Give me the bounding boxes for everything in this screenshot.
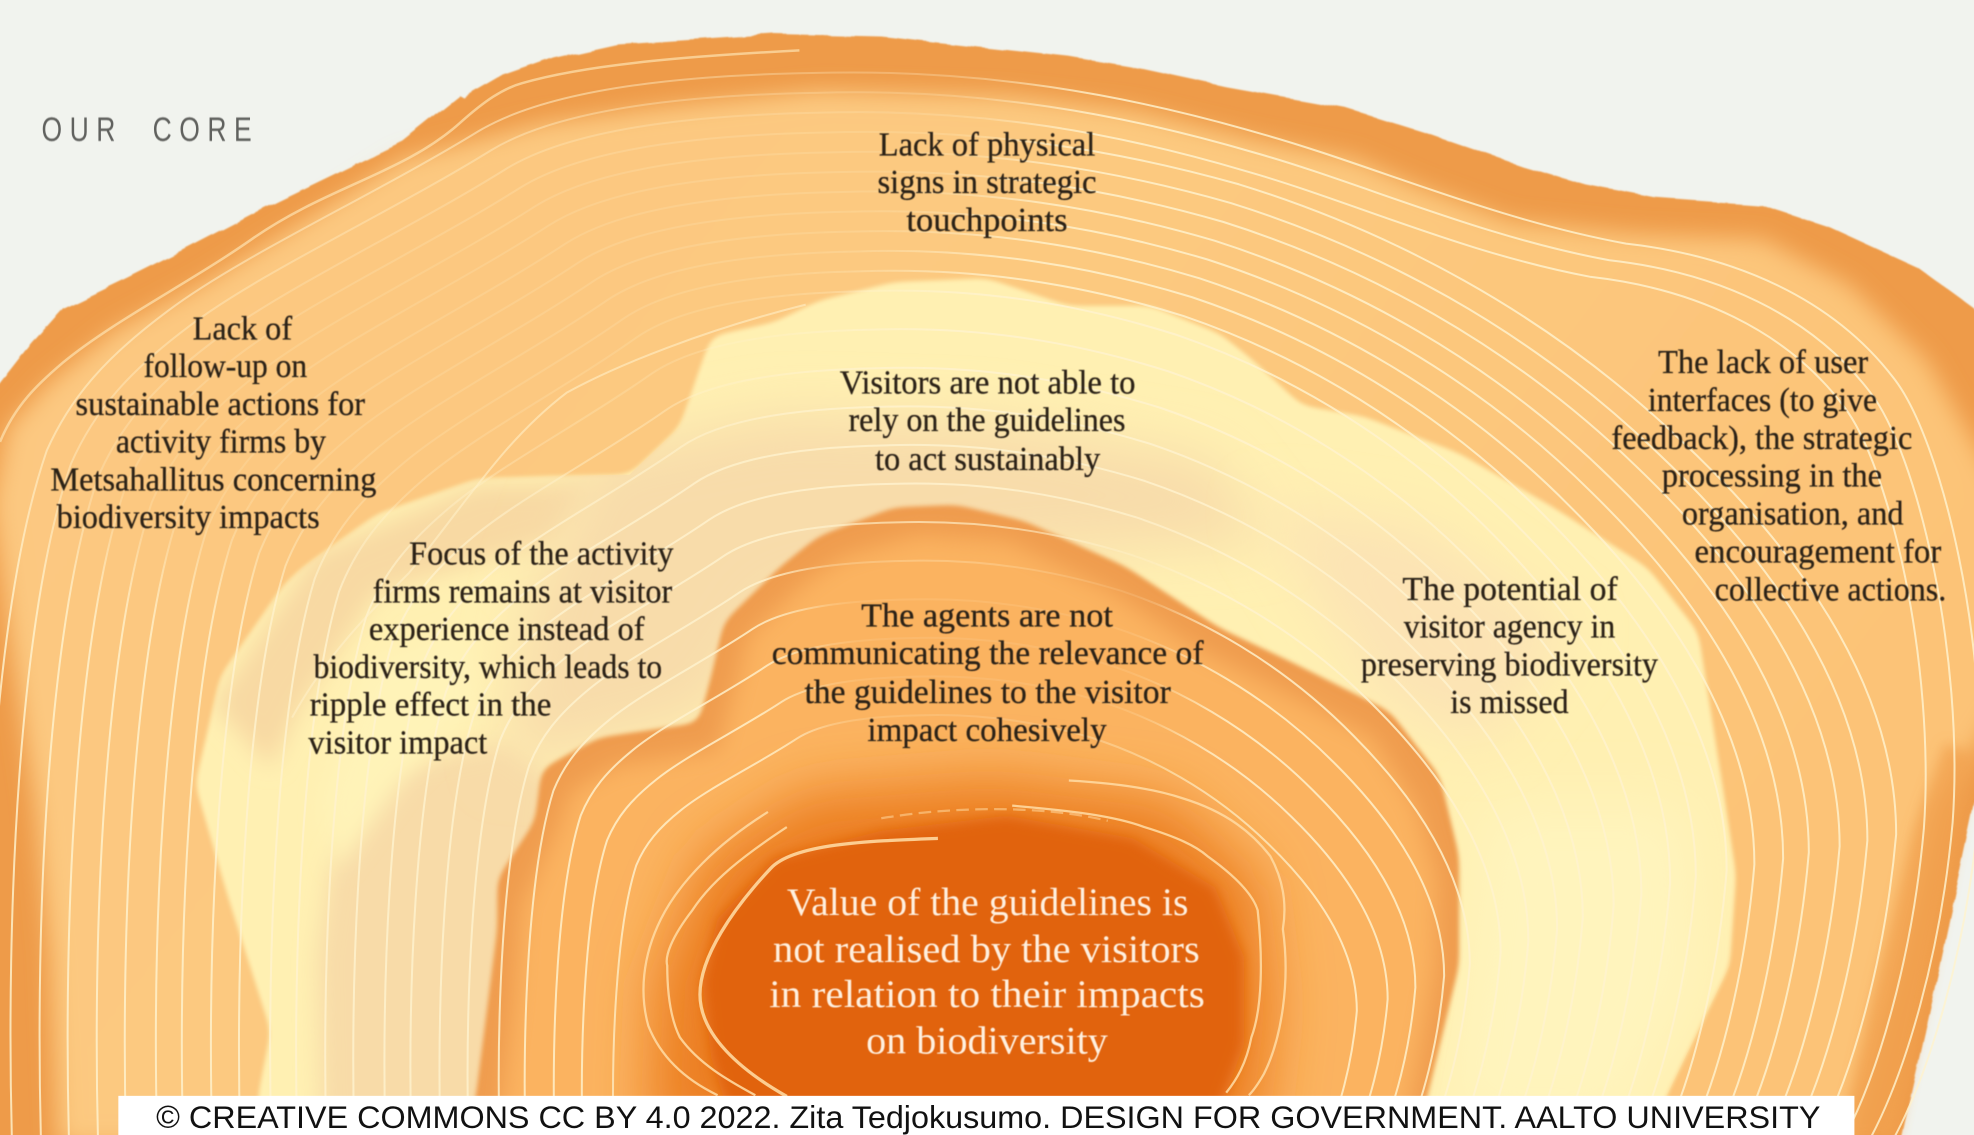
core statement: not realised by the visitors	[773, 928, 1200, 971]
core statement: Value of the guidelines is	[787, 881, 1188, 924]
text block: focus of activity firms: biodiversity, which leads to	[313, 649, 662, 686]
text block: lack of user interfaces: organisation, and	[1682, 495, 1903, 532]
text block: lack of physical signs: signs in strategic	[877, 164, 1097, 201]
text block: lack of follow-up: biodiversity impacts	[57, 499, 320, 536]
pale yellow wood ring	[195, 278, 1736, 1135]
text block: potential of visitor agency	[1361, 571, 1658, 721]
heading: our core: OUR CORE	[42, 111, 252, 149]
text block: lack of user interfaces: encouragement for	[1695, 534, 1942, 571]
text block: focus of activity firms	[308, 536, 674, 761]
text block: visitors are not able	[840, 364, 1136, 478]
lower right dark strip	[1841, 743, 1974, 1135]
text block: focus of activity firms: visitor impact	[308, 724, 488, 761]
text block: focus of activity firms: Focus of the activity	[409, 536, 674, 573]
core statement	[769, 881, 1205, 1063]
text block: lack of user interfaces: The lack of user	[1658, 344, 1869, 381]
text block: lack of user interfaces: feedback), the strategic	[1611, 420, 1912, 457]
text block: lack of follow-up: follow-up on	[144, 348, 307, 385]
text block: lack of follow-up	[50, 310, 376, 536]
pale ring line around yellow ring	[292, 305, 806, 718]
text block: lack of user interfaces: collective actions.	[1715, 571, 1946, 608]
text block: lack of user interfaces	[1611, 344, 1946, 608]
text block: agents not communicating: impact cohesively	[867, 712, 1107, 749]
text block: agents not communicating: communicating the relevance of	[772, 635, 1204, 672]
text block: lack of follow-up: Metsahallitus concerning	[50, 461, 376, 498]
central dark core	[643, 778, 1286, 1135]
text block: agents not communicating: the guidelines to the visitor	[804, 674, 1171, 711]
core ring lines	[643, 781, 1286, 1096]
text block: focus of activity firms: ripple effect in the	[310, 687, 551, 724]
orange inner wood ring	[466, 505, 1459, 1135]
text block: potential of visitor agency: preserving biodiversity	[1361, 646, 1658, 683]
text block: focus of activity firms: firms remains at visitor	[373, 573, 673, 610]
credit footer bar: © CREATIVE COMMONS CC BY 4.0 2022. Zita Tedjokusumo. DESIGN FOR GOVERNMENT. AALTO UNIVERSITY	[156, 1100, 1820, 1135]
text block: lack of physical signs: Lack of physical	[879, 126, 1095, 163]
text block: visitors are not able: Visitors are not able to	[840, 364, 1136, 401]
core statement: on biodiversity	[866, 1020, 1108, 1063]
text block: agents not communicating: The agents are not	[861, 597, 1113, 634]
text block: visitors are not able: rely on the guidelines	[849, 402, 1125, 439]
text block: potential of visitor agency: is missed	[1450, 684, 1569, 721]
text block: lack of physical signs: touchpoints	[906, 202, 1068, 239]
outer pale ring line	[0, 50, 799, 442]
text block: lack of user interfaces: interfaces (to give	[1648, 382, 1877, 419]
text block: lack of physical signs	[877, 126, 1097, 239]
text block: lack of follow-up: sustainable actions for	[76, 386, 366, 423]
text block: lack of follow-up: activity firms by	[116, 424, 326, 461]
text block: agents not communicating	[772, 597, 1204, 749]
text block: potential of visitor agency: The potential of	[1402, 571, 1618, 608]
text block: visitors are not able: to act sustainably	[875, 441, 1100, 478]
text block: lack of follow-up: Lack of	[193, 310, 293, 347]
text block: potential of visitor agency: visitor agency in	[1404, 609, 1615, 646]
text block: lack of user interfaces: processing in the	[1662, 458, 1882, 495]
core statement: in relation to their impacts	[769, 973, 1205, 1016]
text block: focus of activity firms: experience instead of	[369, 611, 645, 648]
